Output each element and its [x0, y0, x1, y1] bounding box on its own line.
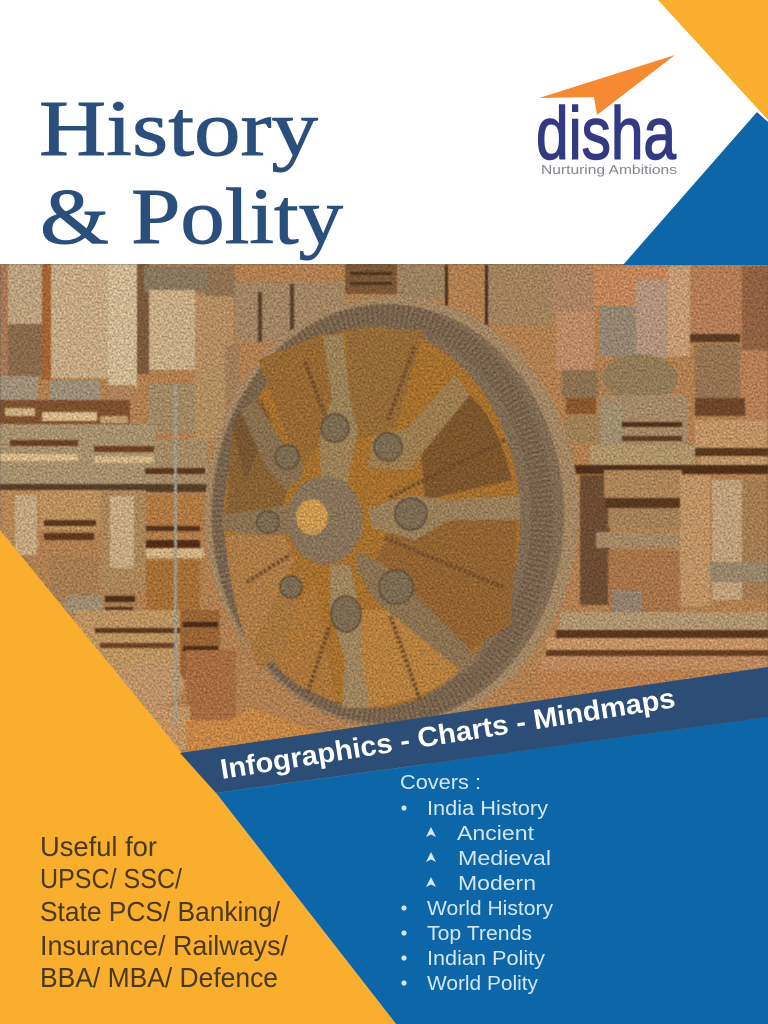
banner text: Infographics - Charts - Mindmaps [218, 682, 677, 785]
lower blue panel [216, 717, 768, 1024]
wheel beaded shafts [247, 345, 505, 700]
covers list: Modern [458, 873, 536, 895]
covers list: Indian Polity [427, 948, 545, 970]
left wall masonry [0, 264, 240, 752]
covers list: Covers : [400, 772, 481, 794]
covers list: Top Trends [427, 923, 532, 945]
wheel spokes [222, 335, 520, 708]
useful for text block [40, 831, 288, 993]
useful for text block: UPSC/ SSC/ [40, 863, 182, 894]
title: History [39, 86, 319, 173]
icon: orange paper plane [539, 55, 675, 115]
covers list: Ancient [457, 823, 535, 845]
navy banner [180, 667, 768, 793]
useful for text block: Useful for [40, 831, 157, 862]
title [39, 86, 344, 261]
covers list: Medieval [458, 848, 551, 870]
title: & Polity [40, 174, 344, 261]
top right blue triangle [623, 112, 768, 265]
wheel rim [205, 296, 579, 728]
covers list [400, 772, 553, 995]
disha logo: Nurturing Ambitions [541, 162, 678, 177]
lower left yellow panel [0, 530, 396, 1024]
list bullets [401, 805, 436, 986]
ground below wheel [232, 708, 322, 740]
useful for text block: BBA/ MBA/ Defence [40, 962, 278, 993]
disha logo: disha [536, 92, 677, 175]
wheel [205, 296, 579, 728]
covers list: World History [427, 898, 553, 920]
covers list: World Polity [427, 973, 538, 995]
disha logo [536, 55, 678, 177]
wheel windows [224, 328, 520, 708]
photo: stone chariot wheel temple [0, 264, 768, 764]
wheel hub [287, 476, 363, 564]
useful for text block: Insurance/ Railways/ [40, 930, 288, 961]
useful for text block: State PCS/ Banking/ [40, 896, 280, 927]
top right yellow triangle [658, 0, 768, 120]
wheel medallions [257, 414, 427, 632]
wall above wheel [205, 264, 488, 342]
covers list: India History [427, 798, 548, 820]
right wall masonry [488, 265, 768, 698]
